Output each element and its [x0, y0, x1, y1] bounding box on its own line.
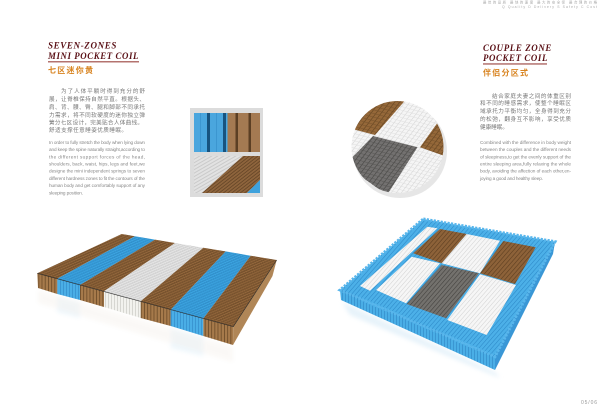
- panel: seven zones text: [47, 40, 146, 195]
- text block: english description: and keep the spine naturally straight,according to: [49, 147, 145, 152]
- text block: english description: human body and get comfortably support of any: [49, 183, 146, 188]
- text block: chinese description: 健康睡眠。: [480, 123, 508, 131]
- header: quality delivery safety cost: [483, 0, 598, 9]
- text block: english description: [479, 140, 572, 181]
- reflection: [38, 290, 233, 362]
- text block: english description: [49, 140, 146, 195]
- text block: chinese description: 力需求，将不同软硬度的迷你独立弹: [49, 111, 145, 119]
- text block: english description: between the couples and the different needs: [480, 147, 572, 152]
- text block: chinese description: 和不同的睡感需求，使整个睡眠区: [480, 99, 571, 107]
- heading: seven zones mini pocket coil: SEVEN-ZONES: [48, 40, 117, 50]
- text block: english description: Combined with the difference in body weight: [480, 140, 572, 145]
- mattress sides: [340, 242, 555, 370]
- mattress shadow: [342, 302, 500, 378]
- text block: chinese description: 的松弛，翻身互不影响，享受优质: [480, 115, 571, 123]
- text block: chinese description: 簧分七区设计，完美贴合人体曲线。: [49, 119, 143, 127]
- heading: couple zone pocket coil: [483, 43, 552, 65]
- text block: chinese description: 域承托力平衡均匀，全身得到充分: [480, 107, 571, 115]
- mattress side: [37, 260, 277, 345]
- mattress top zones: [37, 234, 277, 327]
- text block: english description: the different support forces of the head,: [49, 154, 145, 159]
- heading: seven zones mini pocket coil: MINI POCKET COIL: [47, 51, 139, 61]
- text block: chinese description: 为了人体平躺时得到充分的舒: [61, 87, 145, 95]
- text block: chinese description: 舒适支撑任意睡姿优质睡眠。: [49, 126, 127, 134]
- text block: english description: joying a good and healthy sleep.: [479, 176, 543, 181]
- image: seven-zone mattress: [37, 234, 277, 362]
- page number: 05/06: [581, 400, 597, 406]
- header: quality delivery safety cost: 最佳的品质 最快的速度 最大的安全保 最合理的价格: [483, 0, 598, 4]
- text block: chinese description: [480, 92, 571, 131]
- heading: seven zones mini pocket coil: [47, 40, 139, 62]
- mattress top: [340, 219, 555, 357]
- text block: chinese description: 展，让脊椎保持自然平直。根据头、: [49, 95, 145, 103]
- text block: english description: different hardness zones to fit the contours of the: [49, 176, 145, 181]
- text block: english description: sleeping position.: [49, 190, 83, 195]
- header: quality delivery safety cost: Q Quality D Delivery S Safety C Cost: [502, 5, 597, 9]
- image: spring detail thumbnails: [190, 108, 263, 197]
- text block: chinese description: 结合家庭夫妻之间的体重区别: [492, 92, 571, 100]
- text block: english description: In order to fully stretch the body when lying down: [49, 140, 145, 145]
- text block: english description: entire sleeping area,fully relaxing the whole: [480, 162, 571, 166]
- heading: couple zone pocket coil: COUPLE ZONE: [483, 43, 552, 53]
- text block: english description: designe the mini independent springs to seven: [49, 169, 145, 174]
- text block: english description: body, avoiding the affection of each other,en-: [480, 169, 571, 174]
- subheading: couple zone chinese: 伴侣分区式: [483, 68, 528, 78]
- text block: chinese description: 肩、背、腰、臀、腿和脚部不同承托: [49, 103, 145, 111]
- heading: couple zone pocket coil: POCKET COIL: [483, 53, 548, 63]
- text block: english description: shoulders, back, waist, hips, legs and feet,we: [49, 162, 145, 167]
- subheading: seven zones chinese: 七区迷你黄: [48, 65, 93, 75]
- panel: couple zone text: [479, 43, 572, 181]
- text block: chinese description: [49, 87, 145, 134]
- image: couple zone mattress: [340, 219, 555, 378]
- text block: english description: of sleepiness,to get the evenly support of the: [480, 154, 571, 159]
- image: circular couple zone close-up: [352, 101, 447, 198]
